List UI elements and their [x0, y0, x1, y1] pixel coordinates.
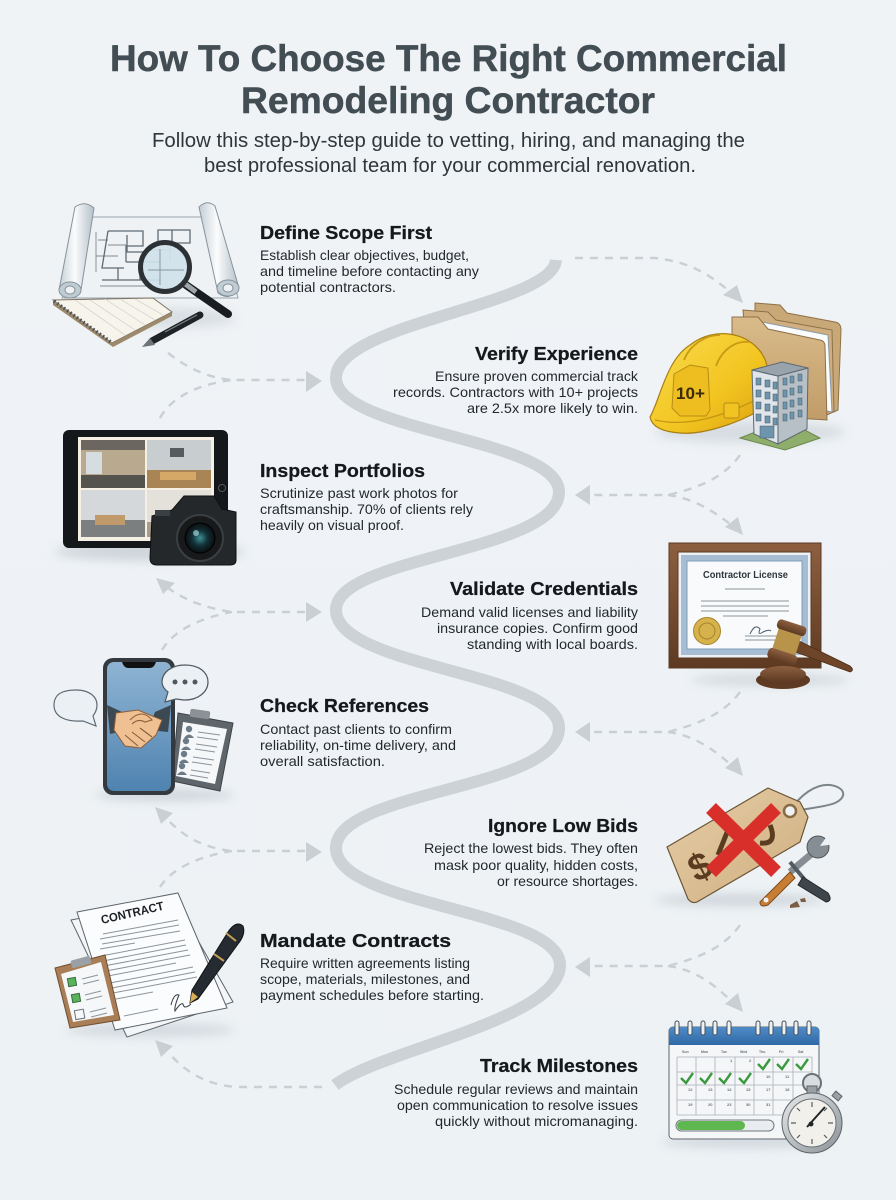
subtitle: [152, 130, 745, 177]
step 4: validate credentials: [421, 543, 852, 689]
icon: calendar with progress bar and stopwatch: Fri: [779, 1050, 784, 1054]
icon: calendar with progress bar and stopwatch: Tue: [721, 1050, 727, 1054]
icon: calendar with progress bar and stopwatch: 10: [766, 1074, 771, 1079]
text: check references: [260, 696, 456, 769]
text: inspect portfolios: Inspect Portfolios: [260, 461, 425, 481]
step 8: track milestones: [394, 1021, 842, 1153]
text: validate credentials: Demand valid licenses and liability: [421, 604, 638, 620]
icon: calendar with progress bar and stopwatch: 17: [766, 1087, 771, 1092]
dashed connector: portfolios to path and references: [156, 578, 322, 650]
text: validate credentials: standing with local boards.: [467, 636, 638, 652]
text: ignore low bids: Reject the lowest bids. They often: [424, 840, 638, 856]
text: track milestones: [394, 1056, 638, 1129]
icon: tablet with photos and camera: [55, 430, 245, 565]
icon: phone, handshake, chat bubbles and clipboard: [54, 658, 235, 801]
dashed connector: path end to contracts: [155, 1040, 322, 1087]
icon: contract, clipboard and fountain pen: [55, 893, 244, 1037]
icon: calendar with progress bar and stopwatch: Sun: [682, 1050, 689, 1054]
icon: calendar with progress bar and stopwatch: 15: [746, 1087, 751, 1092]
text: ignore low bids: Ignore Low Bids: [488, 816, 638, 836]
icon: calendar with progress bar and stopwatch: 11: [785, 1074, 790, 1079]
text: mandate contracts: scope, materials, milestones, and: [260, 971, 470, 987]
text: define scope first: Define Scope First: [260, 223, 432, 243]
icon: hard hat, folders and building: 10+: [676, 384, 705, 403]
text: check references: overall satisfaction.: [260, 753, 385, 769]
icon: crossed-out price tag and tools: $: [681, 844, 720, 891]
icon: calendar with progress bar and stopwatch: Wed: [740, 1050, 747, 1054]
text: track milestones: open communication to resolve issues: [397, 1097, 638, 1113]
dashed connector: credentials to path and low bids: [575, 692, 743, 776]
text: verify experience: [393, 344, 639, 416]
icon: calendar with progress bar and stopwatch: 18: [785, 1087, 790, 1092]
title: How To Choose The Right Commercial: [110, 38, 787, 79]
icon: calendar with progress bar and stopwatch: [660, 1021, 842, 1153]
text: track milestones: Track Milestones: [480, 1056, 638, 1076]
icon: calendar with progress bar and stopwatch: 20: [708, 1102, 713, 1107]
text: verify experience: Ensure proven commercial track: [435, 368, 639, 384]
icon: calendar with progress bar and stopwatch: 30: [746, 1102, 751, 1107]
icon: calendar with progress bar and stopwatch: Mon: [701, 1050, 708, 1054]
icon: contract, clipboard and fountain pen: CONTRACT: [100, 899, 166, 927]
icon: calendar with progress bar and stopwatch: 2: [749, 1058, 752, 1063]
text: mandate contracts: Require written agreements listing: [260, 955, 470, 971]
step 6: ignore low bids: [424, 785, 844, 908]
icon: hard hat, folders and building: [650, 303, 845, 450]
subtitle: best professional team for your commercial renovation.: [204, 155, 696, 177]
dashed connector: references to path and contracts: [155, 807, 322, 887]
step 7: mandate contracts: [55, 893, 484, 1037]
text: mandate contracts: Mandate Contracts: [260, 931, 451, 951]
text: verify experience: Verify Experience: [475, 344, 638, 364]
text: define scope first: and timeline before contacting any: [260, 263, 479, 279]
icon: calendar with progress bar and stopwatch: 23: [727, 1102, 732, 1107]
text: track milestones: quickly without micromanaging.: [435, 1113, 638, 1129]
dashed connector: scope to verify: [575, 258, 743, 303]
step 5: check references: [54, 658, 456, 801]
icon: calendar with progress bar and stopwatch: 13: [708, 1087, 713, 1092]
text: check references: reliability, on-time delivery, and: [260, 737, 456, 753]
text: validate credentials: Validate Credentials: [450, 579, 638, 599]
text: ignore low bids: [424, 816, 638, 889]
dashed connector: scope to path and portfolios: [160, 353, 322, 418]
step 1: define scope first: [53, 203, 479, 347]
icon: crossed-out price tag and tools: [655, 785, 844, 908]
text: ignore low bids: mask poor quality, hidden costs,: [434, 857, 638, 873]
text: inspect portfolios: [260, 461, 473, 533]
dashed connector: low bids to path and milestones: [575, 925, 743, 1012]
text: verify experience: are 2.5x more likely to win.: [467, 400, 638, 416]
icon: calendar with progress bar and stopwatch: Thu: [759, 1050, 765, 1054]
dashed connector: verify to path and credentials: [575, 455, 743, 535]
icon: calendar with progress bar and stopwatch: 31: [766, 1102, 771, 1107]
text: define scope first: potential contractors.: [260, 279, 396, 295]
text: define scope first: Establish clear objectives, budget,: [260, 247, 469, 263]
icon: calendar with progress bar and stopwatch: 12: [688, 1087, 693, 1092]
icon: framed license and gavel: [669, 543, 852, 689]
text: check references: Contact past clients to confirm: [260, 721, 452, 737]
title: [110, 38, 787, 121]
text: check references: Check References: [260, 696, 429, 716]
text: define scope first: [260, 223, 479, 295]
icon: framed license and gavel: Contractor License: [703, 570, 788, 581]
text: mandate contracts: payment schedules before starting.: [260, 987, 484, 1003]
text: ignore low bids: or resource shortages.: [497, 873, 638, 889]
subtitle: Follow this step-by-step guide to vetting, hiring, and managing the: [152, 130, 745, 152]
step 2: verify experience: [393, 303, 845, 450]
text: inspect portfolios: Scrutinize past work photos for: [260, 485, 458, 501]
icon: blueprint, magnifier, notebook and pen: [53, 203, 239, 347]
text: mandate contracts: [260, 931, 484, 1003]
text: validate credentials: insurance copies. Confirm good: [437, 620, 638, 636]
winding path: [335, 260, 560, 1085]
icon: calendar with progress bar and stopwatch: 14: [727, 1087, 732, 1092]
step 3: inspect portfolios: [55, 430, 473, 565]
text: validate credentials: [421, 579, 638, 652]
text: inspect portfolios: heavily on visual proof.: [260, 517, 404, 533]
text: track milestones: Schedule regular reviews and maintain: [394, 1081, 638, 1097]
text: verify experience: records. Contractors with 10+ projects: [393, 384, 638, 400]
icon: calendar with progress bar and stopwatch: Sat: [798, 1050, 804, 1054]
icon: calendar with progress bar and stopwatch: 19: [688, 1102, 693, 1107]
icon: calendar with progress bar and stopwatch: 1: [730, 1058, 733, 1063]
text: inspect portfolios: craftsmanship. 70% of clients rely: [260, 501, 473, 517]
title: Remodeling Contractor: [241, 80, 655, 121]
